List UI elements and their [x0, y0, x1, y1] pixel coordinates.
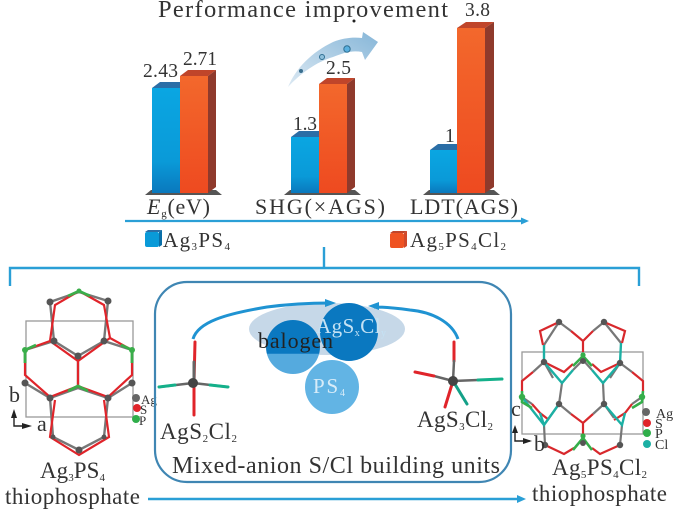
axis arrow	[125, 218, 529, 224]
red S bonds	[522, 322, 643, 454]
legend: Ag5PS4Cl2: 4	[471, 241, 477, 253]
atoms	[22, 298, 136, 454]
curved improvement arrow	[288, 32, 378, 87]
label: PS4: 4	[340, 388, 345, 399]
label: AgSxCl: AgS	[316, 314, 354, 338]
label: AgSxCl: x	[355, 328, 360, 339]
AgSxCl circle	[320, 303, 378, 361]
label: AgSxCl: Cl	[360, 314, 381, 338]
arc arrow from right unit	[368, 302, 458, 339]
label: AgS2Cl2: 2	[232, 433, 237, 445]
green P bonds	[522, 356, 643, 450]
group: SHG bars: 2.5	[326, 58, 351, 79]
legend: left atoms: Ag	[141, 392, 157, 407]
PS4 circle	[305, 360, 359, 414]
label: Ag5PS4Cl2: Ag	[552, 455, 581, 480]
axis labels: (eV)	[167, 194, 210, 219]
group: LDT bars: 3.8	[465, 0, 490, 21]
group: LDT bars: 1	[445, 126, 455, 147]
legend: Ag3PS4: Ag	[163, 228, 190, 252]
label: Ag3PS4: Ag	[40, 458, 68, 483]
legend: right atoms: P	[655, 427, 663, 442]
legend: left atoms	[132, 392, 157, 428]
label: left thiophosphate: thiophosphate	[5, 484, 140, 509]
label: AgS2Cl2: Cl	[209, 419, 231, 444]
legend: Ag5PS4Cl2: Ag	[410, 228, 437, 252]
bottom transformation arrow	[148, 495, 526, 503]
legend: Ag3PS4: 3	[191, 241, 197, 253]
axis labels	[146, 194, 518, 220]
label: Ag5PS4Cl2: PS	[587, 455, 613, 480]
stray dot	[352, 20, 356, 22]
legend: left atoms: S	[140, 402, 147, 417]
axes: b c	[511, 396, 545, 456]
molecule: AgS2Cl2	[159, 342, 228, 415]
axis labels: g	[161, 208, 167, 220]
halogen circle	[266, 320, 320, 374]
label: AgS3Cl2: 2	[488, 421, 493, 433]
label: Ag3PS4: 3	[68, 472, 74, 484]
label: panel caption: Mixed-anion S/Cl building units	[172, 453, 500, 479]
legend: right atoms: Ag	[656, 407, 673, 422]
molecule: AgS3Cl2	[415, 342, 502, 407]
legend: Ag5PS4Cl2: PS	[445, 228, 470, 252]
label: Ag3PS4: 4	[100, 472, 106, 484]
legend: right atoms	[642, 407, 673, 453]
bar chart	[143, 0, 500, 195]
panel: Ag5PS4Cl2 structure	[519, 319, 645, 454]
label: Ag5PS4Cl2: 2	[642, 469, 647, 481]
atoms	[541, 319, 623, 448]
axis labels: SHG(×AGS)	[255, 194, 385, 219]
legend: right atoms: Cl	[655, 438, 668, 453]
group: LDT bars	[423, 0, 500, 195]
group: SHG bars	[284, 58, 361, 195]
label: Ag5PS4Cl2: Cl	[619, 455, 641, 480]
label: AgS2Cl2: 2	[203, 433, 208, 445]
group: SHG bars: 1.3	[293, 114, 317, 135]
axes: b c: b	[534, 431, 545, 456]
legend: Ag5PS4Cl2	[390, 228, 506, 253]
green P bonds	[25, 291, 132, 391]
legend: Ag5PS4Cl2: Cl	[478, 228, 499, 252]
group: Eg bars: 2.43	[143, 61, 178, 82]
label: AgS3Cl2: 3	[459, 421, 465, 433]
axes: a b: b	[9, 382, 20, 407]
label: AgSxCl: y	[381, 328, 386, 339]
axis labels: LDT(AGS)	[410, 194, 518, 219]
light ellipse	[249, 303, 405, 355]
label: PS4: PS	[313, 374, 338, 398]
legend: Ag3PS4: 4	[224, 241, 230, 253]
unit cell	[522, 352, 643, 434]
panel: Ag3PS4 structure	[22, 288, 136, 455]
group: Eg bars	[143, 49, 222, 195]
legend: Ag5PS4Cl2: 2	[500, 241, 506, 253]
gray Ag bonds	[522, 322, 642, 445]
label: AgS2Cl2: AgS	[160, 419, 202, 444]
halogen and building unit blobs	[249, 303, 405, 414]
label: AgS3Cl2: Cl	[465, 407, 487, 432]
legend: right atoms: S	[655, 417, 663, 432]
legend: left atoms: P	[139, 413, 146, 428]
axis labels: E	[146, 194, 161, 219]
legend: Ag3PS4: PS	[198, 228, 223, 252]
axes: a b	[9, 382, 47, 436]
axes: a b: a	[37, 411, 47, 436]
arc arrow from left unit	[193, 299, 336, 339]
bracket connector	[10, 247, 639, 286]
legend: Ag5PS4Cl2: 5	[438, 241, 444, 253]
group: Eg bars: 2.71	[183, 49, 217, 70]
label: AgS3Cl2: AgS	[417, 407, 459, 432]
label: Ag5PS4Cl2: 4	[613, 469, 619, 481]
red S bonds	[25, 291, 132, 455]
axes: b c: c	[511, 396, 521, 421]
legend: Ag3PS4	[145, 228, 230, 253]
panel: mixed-anion building units	[155, 282, 511, 482]
label: right thiophosphate: thiophosphate	[532, 481, 667, 506]
label: Ag5PS4Cl2: 5	[581, 469, 587, 481]
unit cell	[26, 321, 133, 417]
label: Ag3PS4: PS	[74, 458, 99, 483]
gray Ag bonds	[25, 292, 132, 450]
label: balogen: balogen	[258, 328, 333, 353]
cyan Cl bonds	[522, 343, 625, 425]
